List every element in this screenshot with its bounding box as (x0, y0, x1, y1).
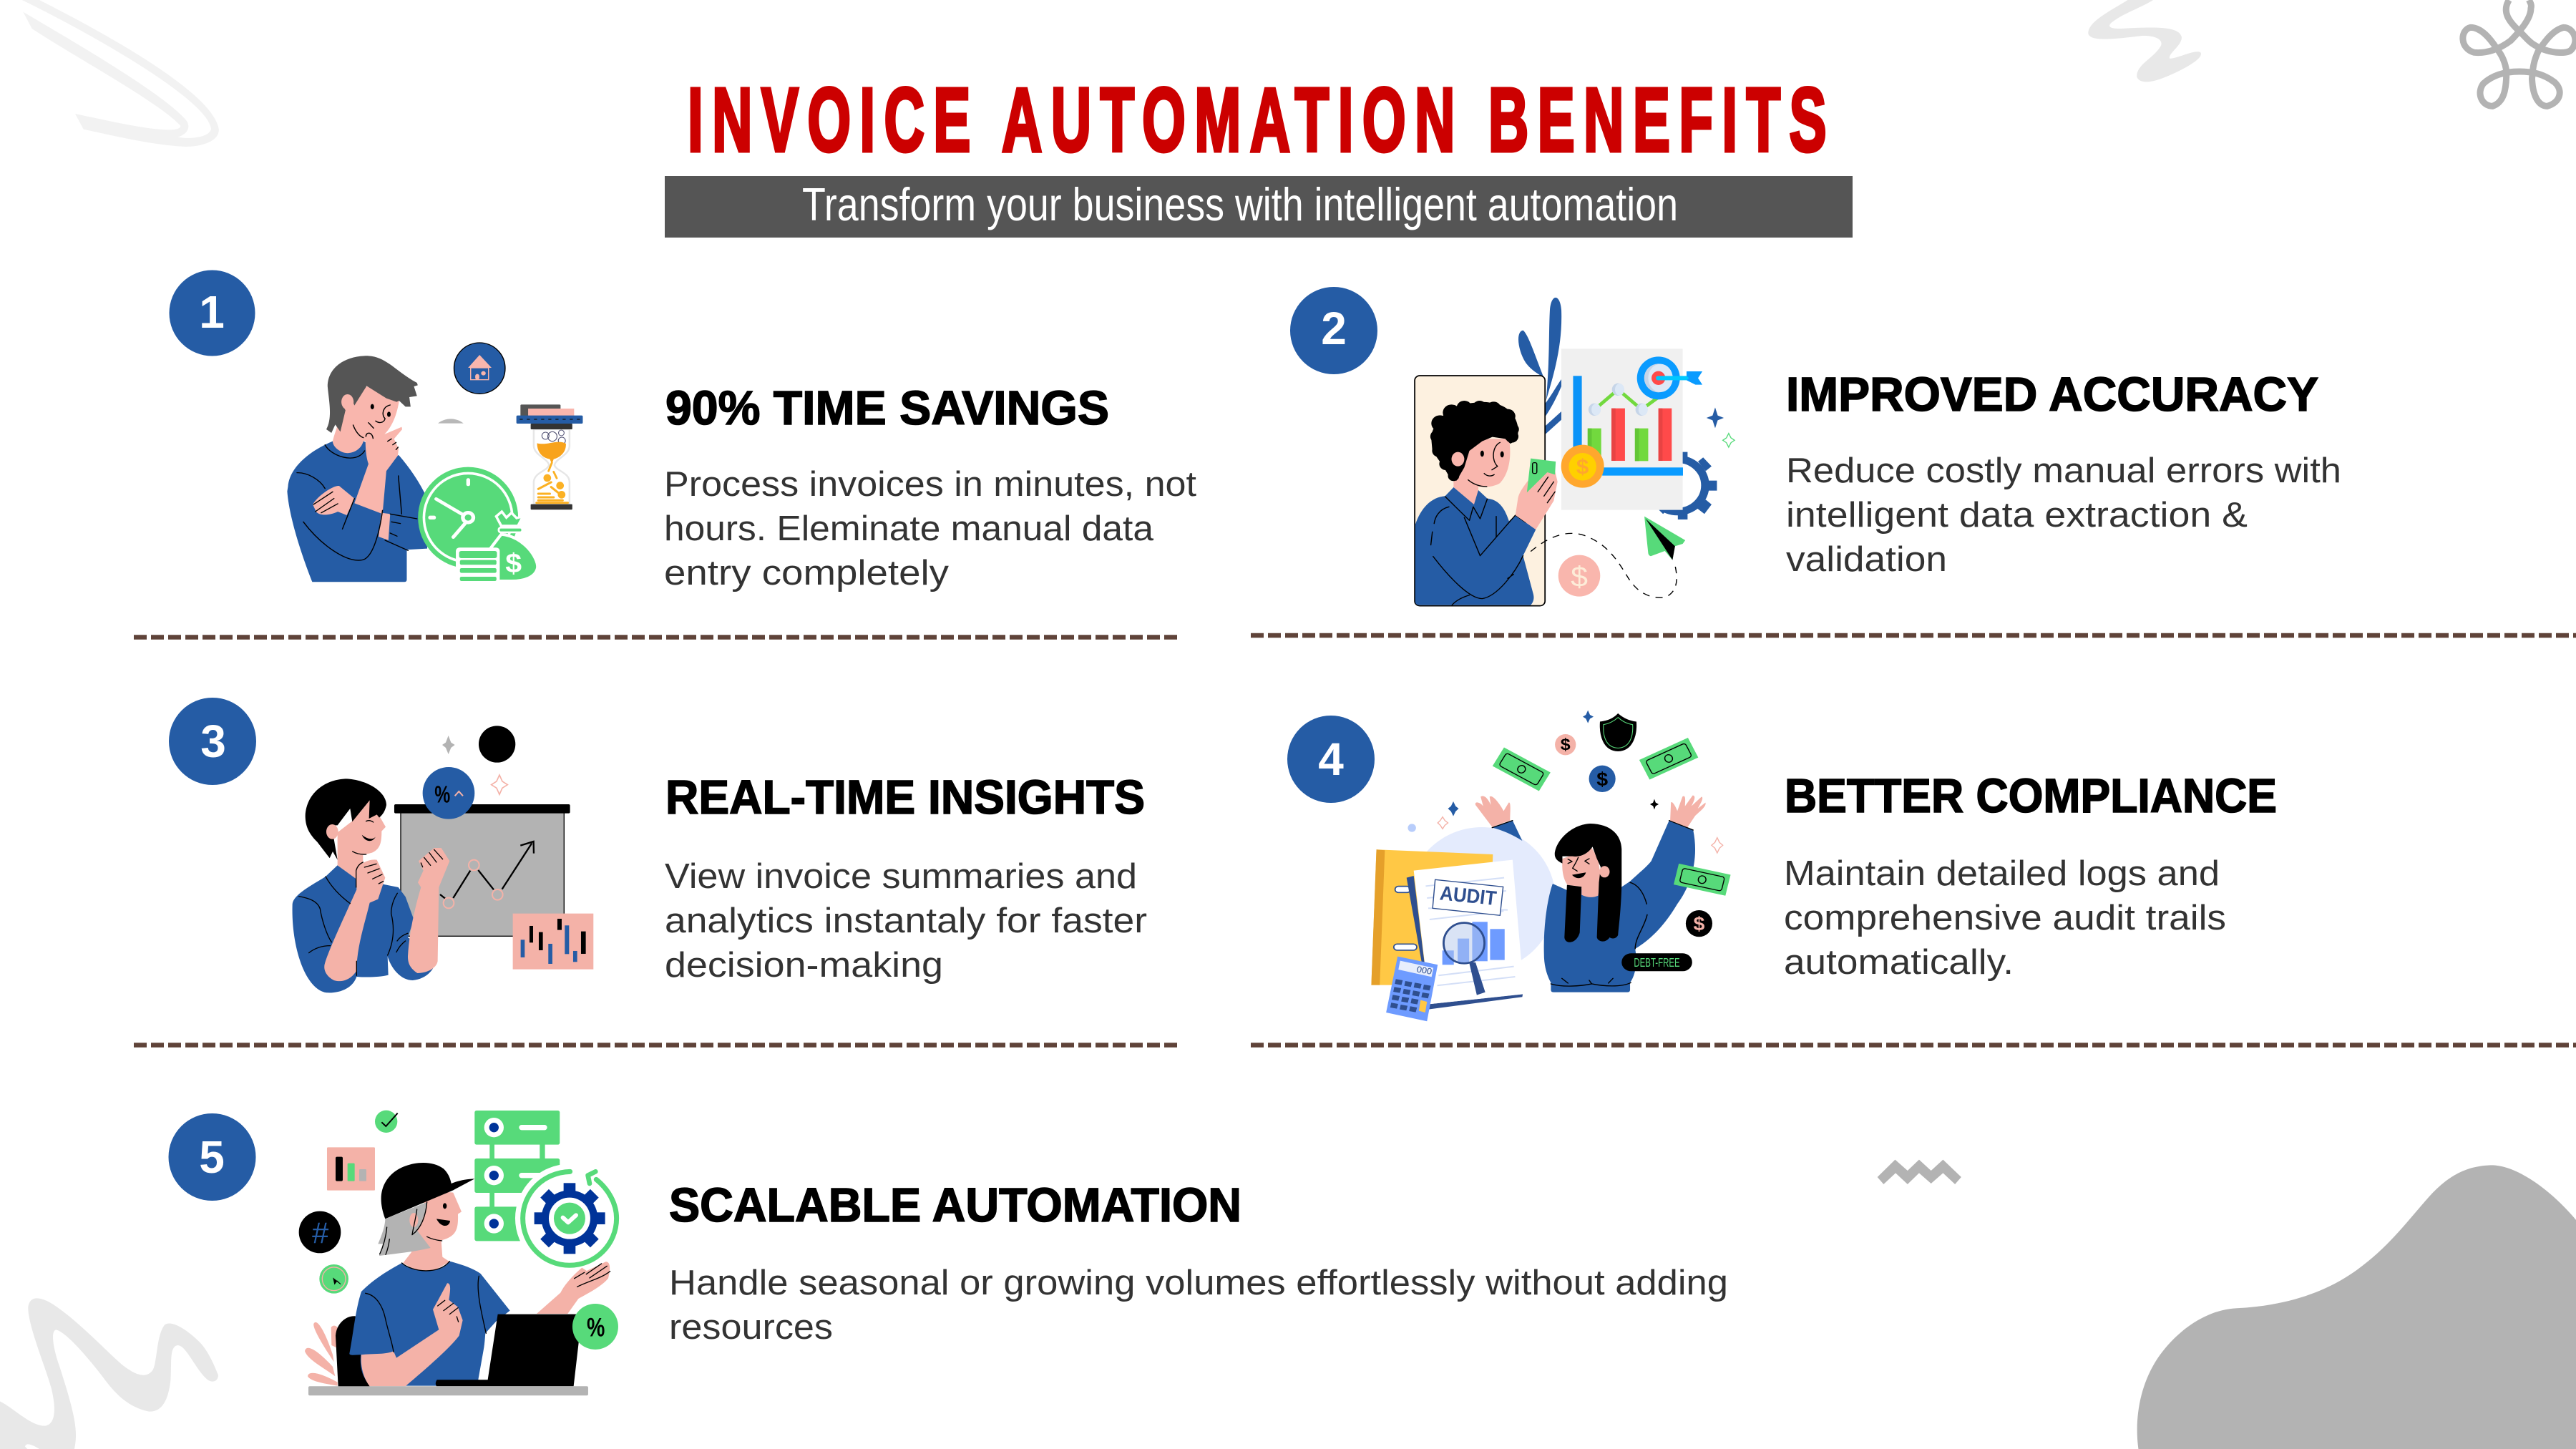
icon: gold coin (1561, 445, 1604, 488)
body: compliance (1784, 854, 2226, 982)
badge 1 (169, 270, 255, 356)
percent badge (572, 1304, 618, 1350)
illustration 4: woman with audit documents (1371, 711, 1731, 1021)
badge 2: 2 (1321, 303, 1347, 354)
percent badge: % (587, 1313, 605, 1342)
coins: $ (1596, 769, 1608, 790)
dashed trail (1531, 533, 1677, 597)
yellow binder (1371, 849, 1493, 985)
audit document (1407, 860, 1524, 1010)
sparkles (442, 736, 507, 794)
chart card (1561, 348, 1683, 510)
percent badge: % (434, 782, 450, 809)
body: accuracy: Reduce costly manual errors with (1786, 452, 2341, 490)
coins (1555, 734, 1712, 937)
body: time savings: hours. Eleminate manual data (664, 509, 1154, 548)
icon: money bag and coins (456, 512, 537, 582)
title: INVOICE AUTOMATION BENEFITS (688, 69, 1835, 170)
body: compliance: Maintain detailed logs and (1784, 854, 2220, 893)
badge 5: 5 (199, 1131, 225, 1183)
magnifier (1443, 923, 1485, 995)
pale circle (1408, 827, 1556, 971)
decoration: grey blob (2137, 1165, 2576, 1449)
heading: time savings: 90% TIME SAVINGS (665, 381, 1109, 435)
sparkles (1707, 407, 1735, 447)
icon: gear (1650, 452, 1717, 519)
person (349, 1163, 610, 1386)
decoration: top-right squiggle (2088, 0, 2201, 82)
debt-free pill (1621, 953, 1692, 971)
body: scalable (669, 1264, 1728, 1347)
dashed dividers (134, 635, 2576, 1045)
icon: gold coin: $ (1576, 456, 1589, 479)
person (293, 779, 449, 992)
body: compliance: automatically. (1784, 943, 2014, 982)
body: scalable: Handle seasonal or growing volumes effortlessly without adding (669, 1264, 1728, 1302)
panel: scalable text (669, 1179, 1728, 1347)
subtitle banner: Transform your business with intelligent automation (802, 178, 1678, 230)
icon: dollar circle: $ (1571, 560, 1588, 592)
calculator: 000 (1416, 965, 1433, 977)
woman (1475, 796, 1706, 992)
icon: money bag and coins: $ (505, 548, 522, 579)
falling banknotes (1493, 738, 1731, 896)
coins: $ (1561, 736, 1571, 754)
icon: gear with refresh ring (515, 1164, 624, 1273)
body: compliance: comprehensive audit trails (1784, 899, 2226, 937)
badge 5 (169, 1113, 256, 1201)
body: time savings: entry completely (664, 554, 950, 592)
curly hair bumps (1430, 401, 1519, 481)
heading: compliance: BETTER COMPLIANCE (1785, 769, 2277, 823)
decoration: knot flower (2463, 0, 2575, 106)
icon: house badge (454, 343, 505, 394)
calculator (1386, 957, 1438, 1021)
illustration 5: person with automation gears (299, 1111, 624, 1395)
candlestick card (513, 914, 593, 970)
badge 3: 3 (200, 716, 226, 767)
clock badge (319, 1264, 348, 1294)
illustration 1: man with clock and hourglass (287, 343, 582, 582)
hash badge: # (312, 1216, 328, 1249)
man (287, 356, 427, 582)
decoration: zigzag (1878, 1160, 1961, 1184)
icon: target with dart (1637, 356, 1702, 399)
decoration: grey arc (438, 419, 464, 424)
icon: dollar circle (1558, 555, 1600, 597)
body: accuracy: intelligent data extraction & (1786, 496, 2248, 535)
audit document: AUDIT (1439, 882, 1498, 910)
body: scalable: resources (669, 1308, 833, 1347)
icon: clock (418, 467, 518, 568)
hash badge (299, 1211, 341, 1253)
laptop (436, 1314, 582, 1386)
badge 2 (1290, 287, 1377, 374)
leaves (1518, 298, 1561, 434)
body: insights: analytics instantaly for faster (665, 902, 1147, 940)
body: time savings (664, 465, 1196, 592)
heading: insights: REAL-TIME INSIGHTS (665, 771, 1145, 824)
check badge (375, 1111, 398, 1133)
badge 4: 4 (1318, 733, 1344, 785)
coins: $ (1694, 913, 1704, 935)
icon: hourglass on books (517, 404, 582, 509)
heading: scalable: SCALABLE AUTOMATION (669, 1179, 1241, 1232)
mini bar chart (327, 1147, 375, 1191)
panel: accuracy text (1786, 368, 2341, 579)
panel: compliance text (1784, 769, 2277, 982)
illustration 3: person with presentation board (293, 726, 593, 992)
badge 4 (1287, 716, 1375, 803)
badge 1: 1 (199, 286, 225, 338)
debt-free pill: DEBT-FREE (1634, 956, 1680, 970)
body: accuracy: validation (1786, 540, 1947, 579)
desk (308, 1386, 588, 1395)
server stack (474, 1111, 560, 1241)
body: time savings: Process invoices in minutes, not (664, 465, 1196, 504)
pale dots (1407, 824, 1561, 924)
body: insights: View invoice summaries and (665, 857, 1137, 896)
badge 3 (169, 698, 256, 785)
body: accuracy (1786, 452, 2341, 579)
decoration: bottom-left squiggle (0, 1298, 218, 1449)
presentation board (394, 804, 570, 936)
heading: accuracy: IMPROVED ACCURACY (1786, 368, 2318, 421)
decoration: top-left swoosh (22, 0, 219, 147)
shield (1601, 714, 1636, 751)
sparkles (1438, 711, 1723, 853)
body: insights: decision-making (665, 946, 943, 985)
icon: paper plane (1644, 517, 1685, 560)
panel: time savings text (664, 381, 1196, 592)
body: insights (665, 857, 1147, 985)
illustration 2: person with phone and chart (1415, 298, 1735, 606)
panel: insights text (665, 771, 1147, 985)
leaves (305, 1322, 340, 1386)
black dot (479, 726, 515, 763)
chair (336, 1316, 370, 1387)
percent badge (423, 767, 474, 819)
phone card with person (1415, 376, 1558, 606)
